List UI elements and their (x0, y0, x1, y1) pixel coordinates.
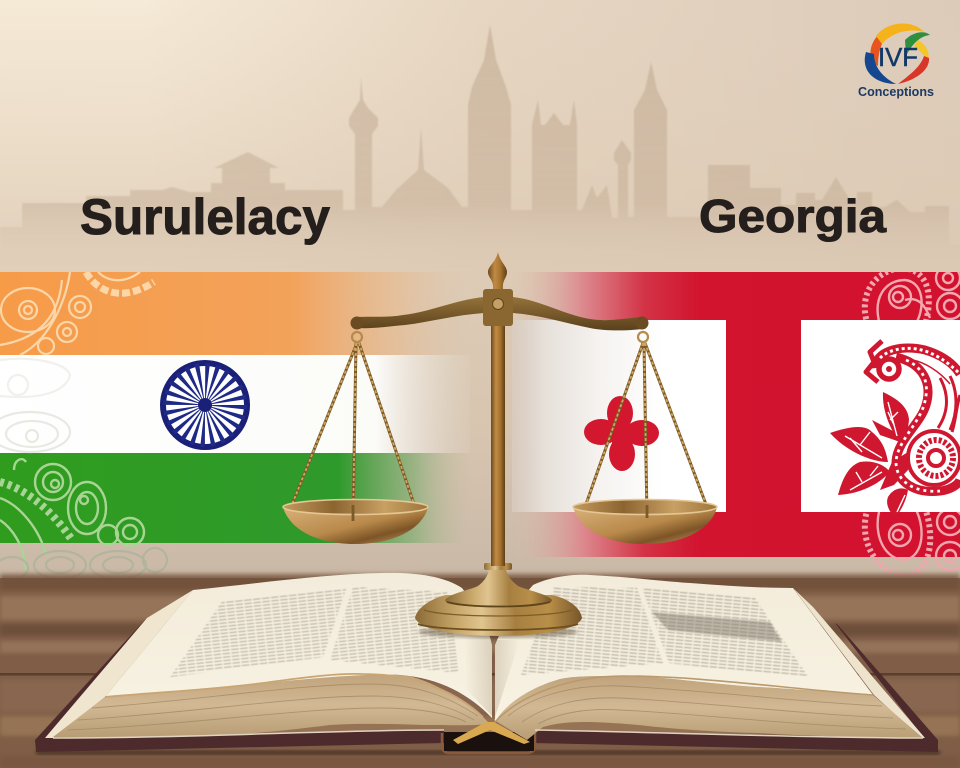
flag square: left white (512, 320, 726, 512)
page block: right (494, 676, 923, 740)
flag band: green (0, 453, 470, 543)
cover inner strip left (53, 730, 444, 738)
paisley leaves (830, 392, 909, 518)
scale finial (488, 252, 507, 289)
leaf veins (845, 402, 905, 512)
panel: India flag (0, 272, 470, 579)
printed text: left page (170, 587, 460, 677)
book headband (453, 722, 530, 744)
scale beam (357, 297, 642, 330)
book cover (35, 618, 938, 753)
left knob (350, 316, 364, 330)
logo wordmark: Conceptions (858, 85, 934, 99)
spine shadow right (494, 640, 520, 720)
book shadow (36, 750, 940, 755)
right chains (585, 343, 707, 517)
left pan (283, 500, 428, 544)
right ring (638, 332, 648, 342)
printed text: right page (521, 587, 809, 678)
page block: left (53, 674, 490, 738)
country name: Surulelacy: Surulelacy (80, 189, 330, 245)
panel: Georgia flag (510, 266, 960, 576)
ornament: white paisley (0, 359, 70, 452)
flag band: saffron (0, 272, 470, 355)
wooden table (0, 574, 960, 768)
country name: Georgia: Georgia (699, 190, 886, 242)
icon: red paisley emblem (830, 341, 960, 518)
left page (105, 573, 492, 718)
dark print band (652, 612, 782, 642)
right pan (573, 500, 717, 544)
flag square: right white (801, 320, 960, 512)
paisley inner spiral (908, 360, 960, 485)
ornament: bottom red paisley (865, 508, 960, 576)
paisley body dots (896, 360, 940, 491)
open book (35, 573, 940, 755)
right page (495, 575, 873, 722)
scale pivot block (483, 289, 513, 326)
background: beige wall (0, 0, 960, 580)
ornament: saffron paisley (0, 272, 154, 355)
ornament: top red paisley (862, 272, 960, 320)
logo: IVF Conceptions (858, 23, 934, 99)
paisley head curl (879, 359, 899, 379)
left chains (291, 343, 415, 521)
paisley outer dots (880, 348, 960, 374)
icon: Ashoka chakra (163, 363, 247, 447)
flag band: white (0, 355, 470, 453)
paisley body band (896, 357, 960, 491)
ornament: green paisley (0, 459, 144, 570)
flag field: red (510, 272, 960, 557)
right knob (636, 316, 648, 330)
back page leaves (45, 590, 193, 738)
scale base (415, 563, 582, 638)
page lines: right (508, 686, 906, 729)
scale pole (491, 322, 505, 566)
pivot knob (492, 298, 504, 310)
page edge highlight (105, 674, 483, 717)
spine shadow (465, 600, 492, 716)
paisley outer band (876, 348, 960, 374)
paisley head fringe (866, 341, 882, 382)
cover inner strip right (535, 730, 923, 738)
left ring (352, 332, 362, 342)
logo: IVF Conceptions: IVF (878, 42, 918, 72)
paisley head dot (886, 366, 892, 372)
balance scale (283, 252, 717, 638)
ornament: lower paisley on wall (0, 548, 167, 579)
icon: red four-petal flower (584, 396, 659, 471)
page edge highlight right (495, 676, 873, 722)
skyline silhouette (0, 25, 960, 272)
page lines: left (68, 684, 478, 730)
